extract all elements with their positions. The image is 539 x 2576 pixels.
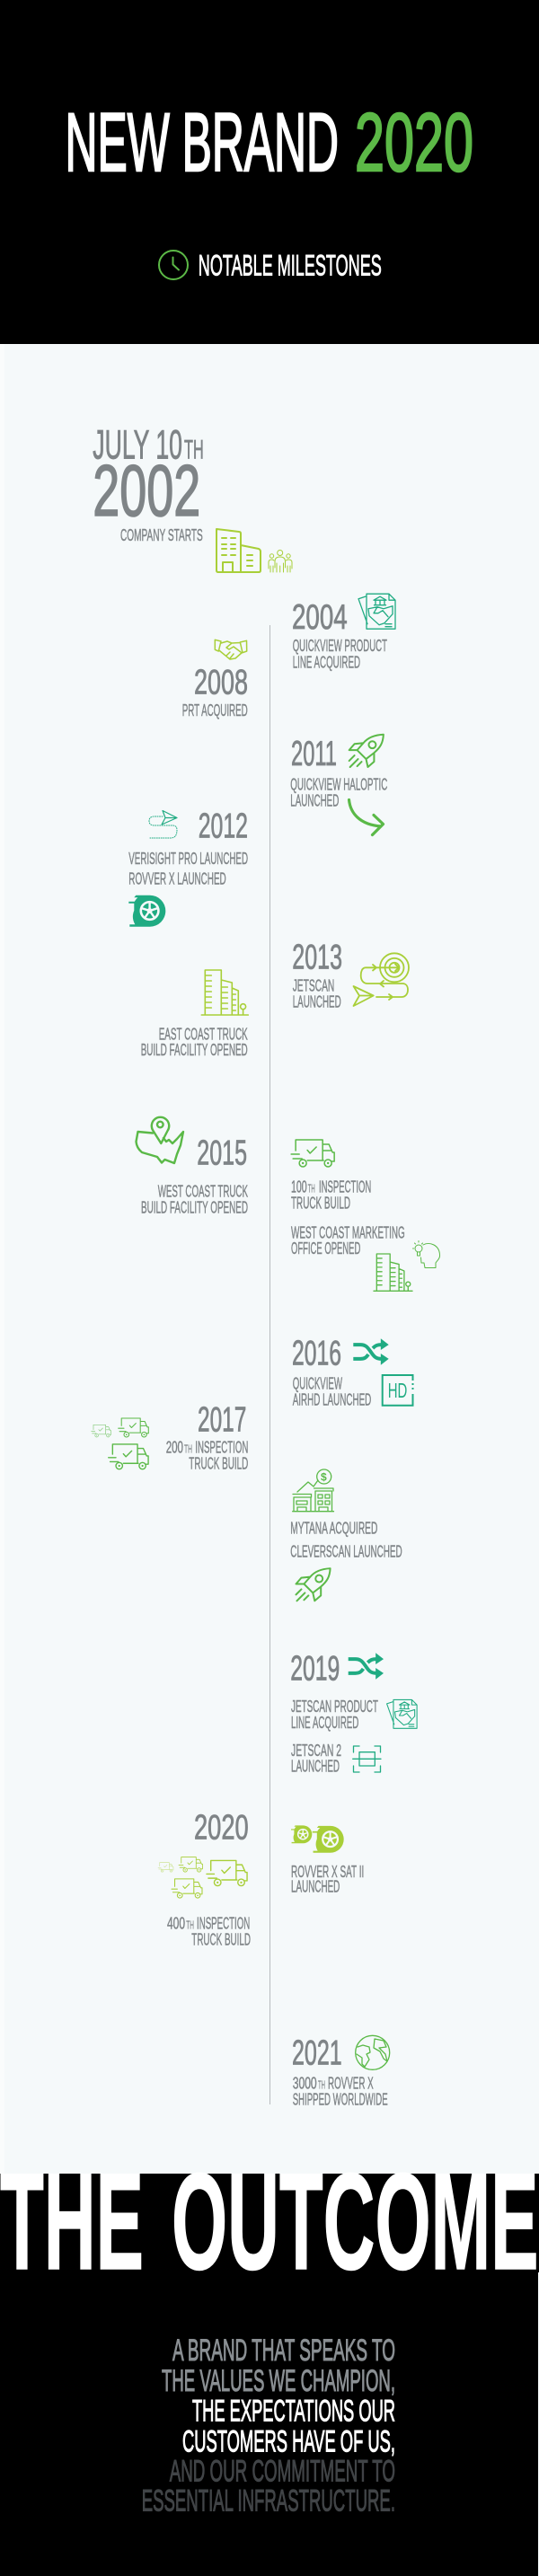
caption: [291, 1697, 378, 1732]
panel: header: [0, 0, 539, 344]
milestone: 2011: [290, 735, 387, 835]
icon: acquisition document: [387, 1699, 417, 1728]
icon: rocket: [296, 1568, 331, 1601]
milestone: 2013: [292, 938, 409, 1010]
caption: INSPECTION: [195, 1438, 248, 1457]
subtitle: NOTABLE MILESTONES: [199, 250, 382, 282]
caption: LAUNCHED: [291, 1877, 340, 1896]
icon: truck: [291, 1140, 334, 1167]
icon: rocket: [349, 735, 384, 767]
caption: CLEVERSCAN LAUNCHED: [290, 1541, 402, 1560]
icon: shuffle: [353, 1338, 389, 1365]
caption: LINE ACQUIRED: [293, 652, 360, 671]
icon: US map with pin: [137, 1117, 183, 1163]
caption: [128, 849, 248, 888]
heading: [0, 2145, 539, 2298]
caption: QUICKVIEW HALOPTIC: [290, 774, 387, 793]
milestone: 2020 left: [158, 1809, 251, 1949]
caption: [167, 1914, 251, 1949]
caption: [291, 1862, 364, 1896]
caption: LAUNCHED: [291, 1757, 340, 1776]
icon: handshake: [215, 640, 247, 659]
milestone: Mytana and Cleverscan: [290, 1469, 402, 1601]
caption: 400: [167, 1914, 185, 1933]
milestone: 2020 right: [291, 1825, 364, 1896]
year: 2017: [198, 1401, 246, 1440]
milestone: 2021: [292, 2033, 390, 2108]
milestone: 2004: [292, 594, 395, 671]
date: TH: [184, 435, 204, 465]
caption: BUILD FACILITY OPENED: [141, 1040, 248, 1059]
milestone: 2012: [128, 807, 248, 927]
caption: JETSCAN PRODUCT: [291, 1697, 378, 1716]
year: 2019: [290, 1650, 340, 1689]
icon: acquisition document: [358, 594, 395, 629]
caption: [141, 1182, 248, 1217]
caption: JETSCAN: [293, 975, 334, 994]
caption: QUICKVIEW PRODUCT: [293, 636, 387, 655]
year: 2008: [194, 664, 248, 702]
caption: 100th inspection: TH: [308, 1183, 315, 1195]
year: 2020: [194, 1809, 249, 1848]
caption: EAST COAST TRUCK: [159, 1024, 248, 1043]
milestone: July 10th 2002: [93, 422, 292, 572]
caption: west coast office: WEST COAST MARKETING: [291, 1222, 405, 1241]
panel: timeline: [0, 344, 539, 2174]
icon: two tires: [291, 1825, 344, 1853]
caption: 100th inspection: [291, 1178, 371, 1212]
icon: head with light bulb: [413, 1241, 440, 1268]
caption: TH: [186, 1919, 194, 1932]
caption: west coast office: OFFICE OPENED: [291, 1239, 360, 1257]
caption: INSPECTION: [197, 1914, 250, 1933]
year: 2015: [197, 1134, 247, 1173]
year: 2012: [199, 807, 248, 846]
statement text: [142, 2333, 395, 2519]
icon: office building: [216, 529, 261, 572]
caption: [291, 1741, 341, 1776]
milestone: 2016: [292, 1334, 413, 1409]
caption: [290, 774, 387, 809]
caption: VERISIGHT PRO LAUNCHED: [128, 849, 248, 868]
milestone: 100th truck and west coast office: [291, 1140, 440, 1291]
milestone: 2017: [92, 1401, 248, 1473]
icon: bank buildings: $: [321, 1471, 327, 1484]
caption: 3000: [293, 2074, 317, 2093]
caption: [293, 1374, 371, 1409]
caption: COMPANY STARTS: [120, 525, 203, 544]
caption: [166, 1438, 248, 1473]
caption: [293, 2074, 388, 2108]
icon: clock: [159, 251, 188, 279]
icon: globe: [356, 2035, 390, 2069]
caption: [141, 1024, 248, 1059]
icon: scanner frame: [353, 1746, 381, 1772]
year: 2011: [291, 735, 337, 773]
caption: west coast office: [291, 1222, 405, 1257]
caption: ROVVER X: [328, 2074, 374, 2093]
icon: HD badge: HD: [388, 1379, 407, 1402]
caption: 100th inspection: INSPECTION: [319, 1178, 371, 1196]
caption: JETSCAN 2: [291, 1741, 341, 1760]
caption: QUICKVIEW: [293, 1374, 342, 1393]
panel: the outcome: [0, 2145, 539, 2576]
icon: shuffle: [349, 1653, 384, 1680]
caption: PRT ACQUIRED: [182, 701, 248, 719]
icon: people: [269, 550, 292, 572]
caption: TH: [318, 2079, 325, 2092]
icon: target path: [354, 953, 409, 1006]
caption: TRUCK BUILD: [191, 1930, 251, 1949]
caption: [293, 975, 341, 1010]
caption: LINE ACQUIRED: [291, 1713, 358, 1732]
caption: ROVVER X SAT II: [291, 1862, 364, 1881]
heading: THE: [0, 2145, 144, 2298]
milestone: 2019: [290, 1650, 417, 1776]
milestone: 2008: [182, 640, 248, 719]
caption: BUILD FACILITY OPENED: [141, 1198, 248, 1217]
date: JULY 10: [93, 422, 182, 467]
caption: 100th inspection: 100: [291, 1178, 307, 1196]
caption: AIRHD LAUNCHED: [293, 1390, 371, 1409]
icon: towers: [374, 1254, 412, 1291]
caption: WEST COAST TRUCK: [158, 1182, 248, 1201]
icon: tire: [128, 895, 165, 927]
year: 2016: [292, 1334, 341, 1372]
caption: LAUNCHED: [290, 790, 339, 809]
caption: 100th inspection: TRUCK BUILD: [291, 1193, 350, 1212]
caption: LAUNCHED: [293, 992, 341, 1010]
caption: MYTANA ACQUIRED: [290, 1518, 377, 1537]
year: 2004: [292, 598, 348, 637]
year: 2002: [93, 451, 200, 532]
caption: ROVVER X LAUNCHED: [128, 869, 226, 888]
caption: SHIPPED WORLDWIDE: [293, 2089, 388, 2108]
title: 2020: [355, 97, 473, 189]
icon: four trucks: [158, 1857, 247, 1898]
caption: [293, 636, 387, 671]
icon: towers: [201, 970, 248, 1015]
year: 2013: [292, 938, 342, 976]
arrow: [349, 799, 383, 835]
caption: TH: [184, 1443, 192, 1456]
caption: TRUCK BUILD: [189, 1454, 248, 1473]
caption: 200: [166, 1438, 183, 1457]
icon: paper plane: [149, 810, 177, 838]
milestone: 2015: [137, 1117, 248, 1217]
icon: three trucks: [92, 1418, 148, 1469]
milestone: east coast facility: [141, 970, 248, 1059]
icon: bank buildings: [293, 1469, 334, 1512]
year: 2021: [292, 2033, 342, 2072]
